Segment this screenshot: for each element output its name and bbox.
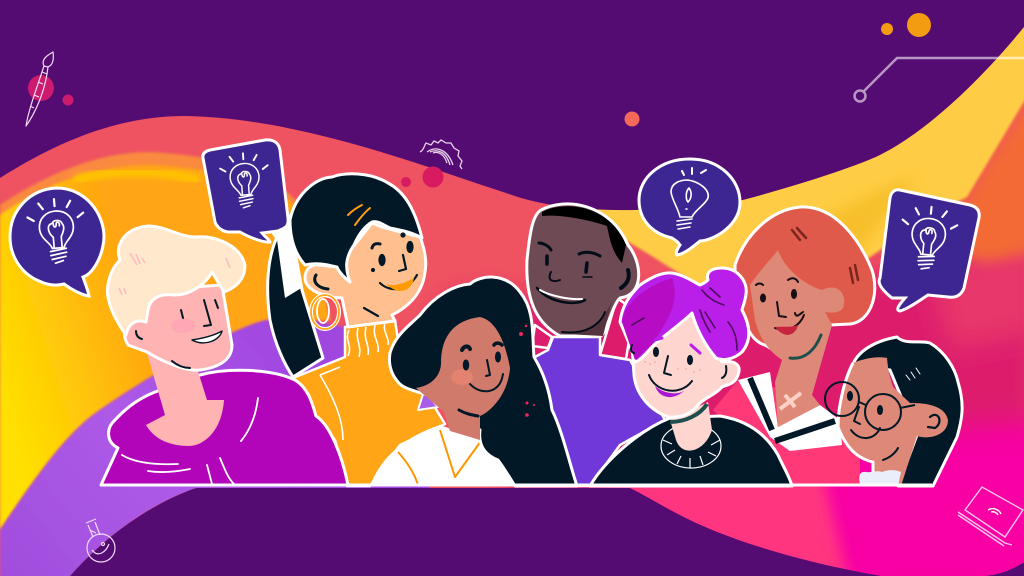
person: blond man	[101, 226, 348, 485]
face	[838, 357, 948, 486]
cheek	[171, 319, 195, 333]
hair	[853, 337, 962, 486]
hair strands	[632, 288, 737, 350]
collar	[661, 424, 721, 468]
cheek	[451, 369, 473, 385]
head and neck	[305, 223, 426, 327]
earring	[311, 295, 339, 329]
person: woman with ponytail	[268, 174, 445, 486]
icon: gear	[420, 140, 462, 169]
facial features	[315, 234, 417, 316]
blond hair	[107, 226, 245, 335]
smile	[192, 331, 222, 343]
person: woman with long dark hair	[370, 277, 577, 486]
earring inner	[311, 295, 339, 329]
white shirt	[370, 425, 515, 486]
person: woman with glasses	[825, 337, 962, 486]
hair	[290, 174, 422, 282]
background gaps	[532, 298, 634, 359]
lips	[386, 278, 414, 291]
orange sweater	[293, 320, 445, 486]
circuit line	[854, 58, 1024, 102]
hair highlight	[348, 205, 370, 225]
face and neck	[750, 250, 844, 427]
bow	[268, 210, 303, 298]
ground line	[101, 484, 932, 486]
face	[632, 312, 739, 417]
black sweater	[590, 416, 792, 486]
necklace	[780, 393, 801, 409]
head	[125, 285, 232, 370]
icon: flask	[86, 519, 115, 562]
choker	[670, 404, 707, 422]
earring	[418, 391, 438, 410]
body	[713, 380, 860, 484]
hair	[735, 207, 875, 360]
hair	[542, 206, 626, 263]
exclamation bulb	[671, 168, 708, 229]
orange collar	[398, 430, 481, 485]
speech bubble: round with bulb	[10, 188, 104, 296]
facial features	[756, 228, 858, 358]
turtleneck folds	[320, 322, 388, 440]
brows	[655, 338, 700, 353]
neck	[146, 353, 224, 446]
head	[527, 204, 639, 336]
facial features	[848, 368, 939, 460]
hair marks	[119, 253, 230, 295]
person: man with dark skin	[527, 204, 665, 486]
icon: paint brush	[26, 52, 53, 126]
facial features	[631, 345, 726, 391]
speech bubble: oval with exclamation bulb	[639, 159, 740, 255]
scarf	[859, 470, 901, 486]
face outline	[838, 363, 873, 472]
purple hair	[620, 268, 749, 362]
purple shirt	[533, 337, 665, 486]
decorative dots	[28, 13, 931, 188]
speech bubble: square with bulb	[879, 190, 979, 311]
glasses	[825, 382, 915, 430]
freckles	[644, 361, 701, 373]
hoodie creases	[122, 398, 258, 484]
icon: laptop	[958, 487, 1023, 546]
neck shadow	[565, 300, 612, 336]
person: purple-haired girl	[590, 268, 792, 486]
hair shading	[622, 278, 675, 360]
hair beads	[519, 325, 535, 417]
lips	[655, 386, 685, 397]
ponytail	[268, 235, 323, 377]
purple hoodie	[101, 370, 348, 485]
lips	[775, 325, 798, 335]
facial features	[136, 300, 218, 368]
face and neck	[416, 317, 510, 440]
neck	[670, 402, 712, 451]
speech bubble: rounded rectangle with bulb	[203, 140, 288, 242]
person: coral-haired woman	[713, 207, 875, 484]
hair	[389, 277, 577, 486]
facial features	[459, 343, 503, 416]
white collar	[738, 372, 842, 451]
facial features	[537, 243, 629, 333]
